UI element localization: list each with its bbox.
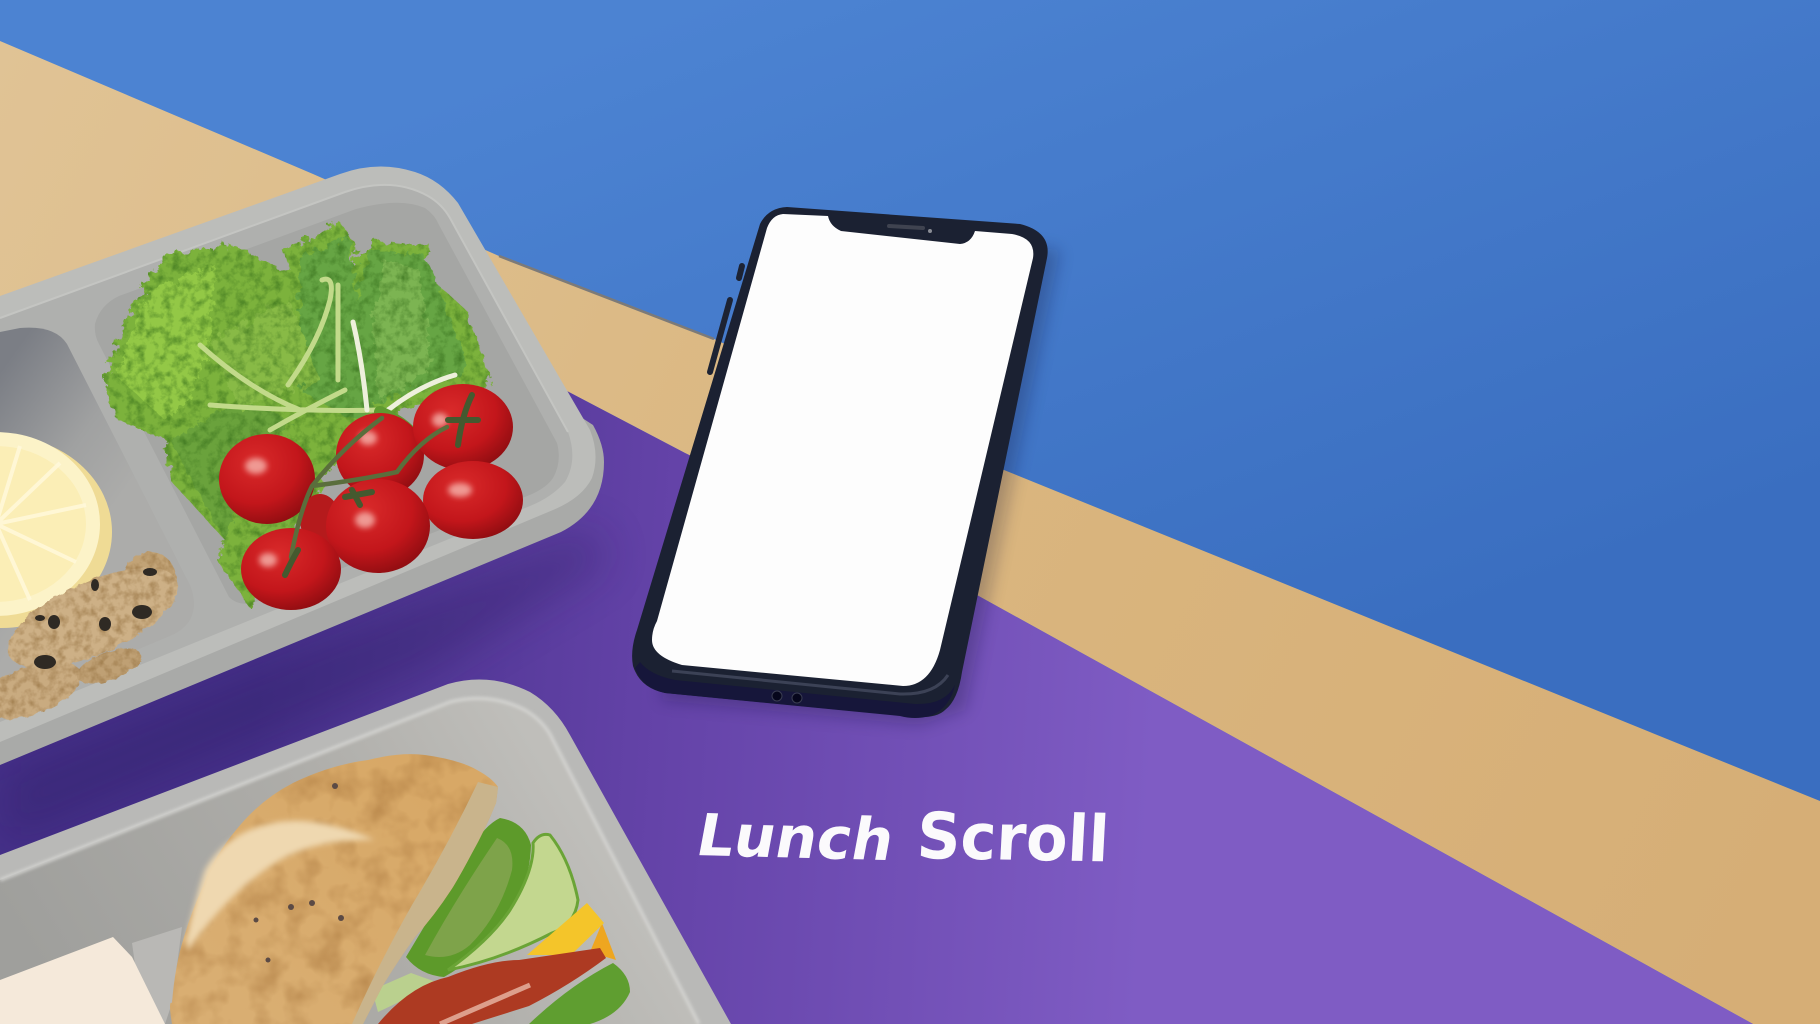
rim highlight — [0, 185, 568, 432]
lower cucumber — [529, 963, 630, 1024]
small green vegetable — [372, 973, 439, 1012]
cherry tomatoes — [219, 384, 523, 610]
roll crumb side — [352, 782, 498, 1024]
phone ports — [772, 691, 802, 703]
salad well — [95, 203, 559, 604]
tray: lower sandwich tray — [0, 680, 731, 1024]
phone speaker — [889, 226, 923, 228]
white strips — [353, 322, 455, 410]
red pepper highlight — [440, 985, 530, 1024]
shadow under lower-left trays — [0, 530, 610, 850]
phone body — [632, 207, 1048, 717]
title word: Scroll: Scroll — [915, 800, 1111, 877]
tray rim — [0, 680, 731, 1024]
tray inner deck — [0, 185, 572, 722]
lemon slice — [0, 432, 112, 628]
shredded green strips — [200, 279, 380, 430]
tray: upper salad tray — [0, 166, 604, 765]
lettuce — [103, 222, 490, 608]
roll pale band — [186, 821, 375, 950]
phone — [632, 207, 1048, 718]
phone screen — [652, 214, 1033, 686]
yellow pepper — [527, 903, 604, 955]
second cucumber slice — [448, 834, 578, 970]
cookies — [0, 548, 192, 730]
tray well — [0, 698, 699, 1024]
sliced cucumber — [406, 818, 531, 977]
left well — [0, 328, 194, 707]
tomato stems — [291, 418, 447, 557]
title word: Lunch: Lunch — [691, 802, 900, 874]
roll seeds — [254, 783, 344, 962]
phone lower edge — [635, 662, 955, 718]
white bread — [0, 937, 165, 1024]
tray rim — [0, 166, 596, 742]
side buttons — [710, 266, 742, 372]
cucumber flesh — [425, 838, 512, 957]
red pepper — [378, 948, 606, 1024]
tray lip — [0, 300, 604, 765]
phone shadow — [660, 225, 1060, 725]
foil wrap — [132, 927, 182, 1024]
bread roll — [170, 754, 498, 1024]
phone camera — [928, 229, 932, 233]
rim highlight — [0, 698, 699, 1024]
title: Lunch Scroll — [691, 800, 1111, 877]
tan edge line — [499, 256, 714, 339]
tomato highlights — [245, 413, 472, 567]
orange pepper — [590, 923, 616, 960]
phone edge highlight — [672, 671, 948, 694]
background: purple paper — [0, 390, 1753, 1024]
